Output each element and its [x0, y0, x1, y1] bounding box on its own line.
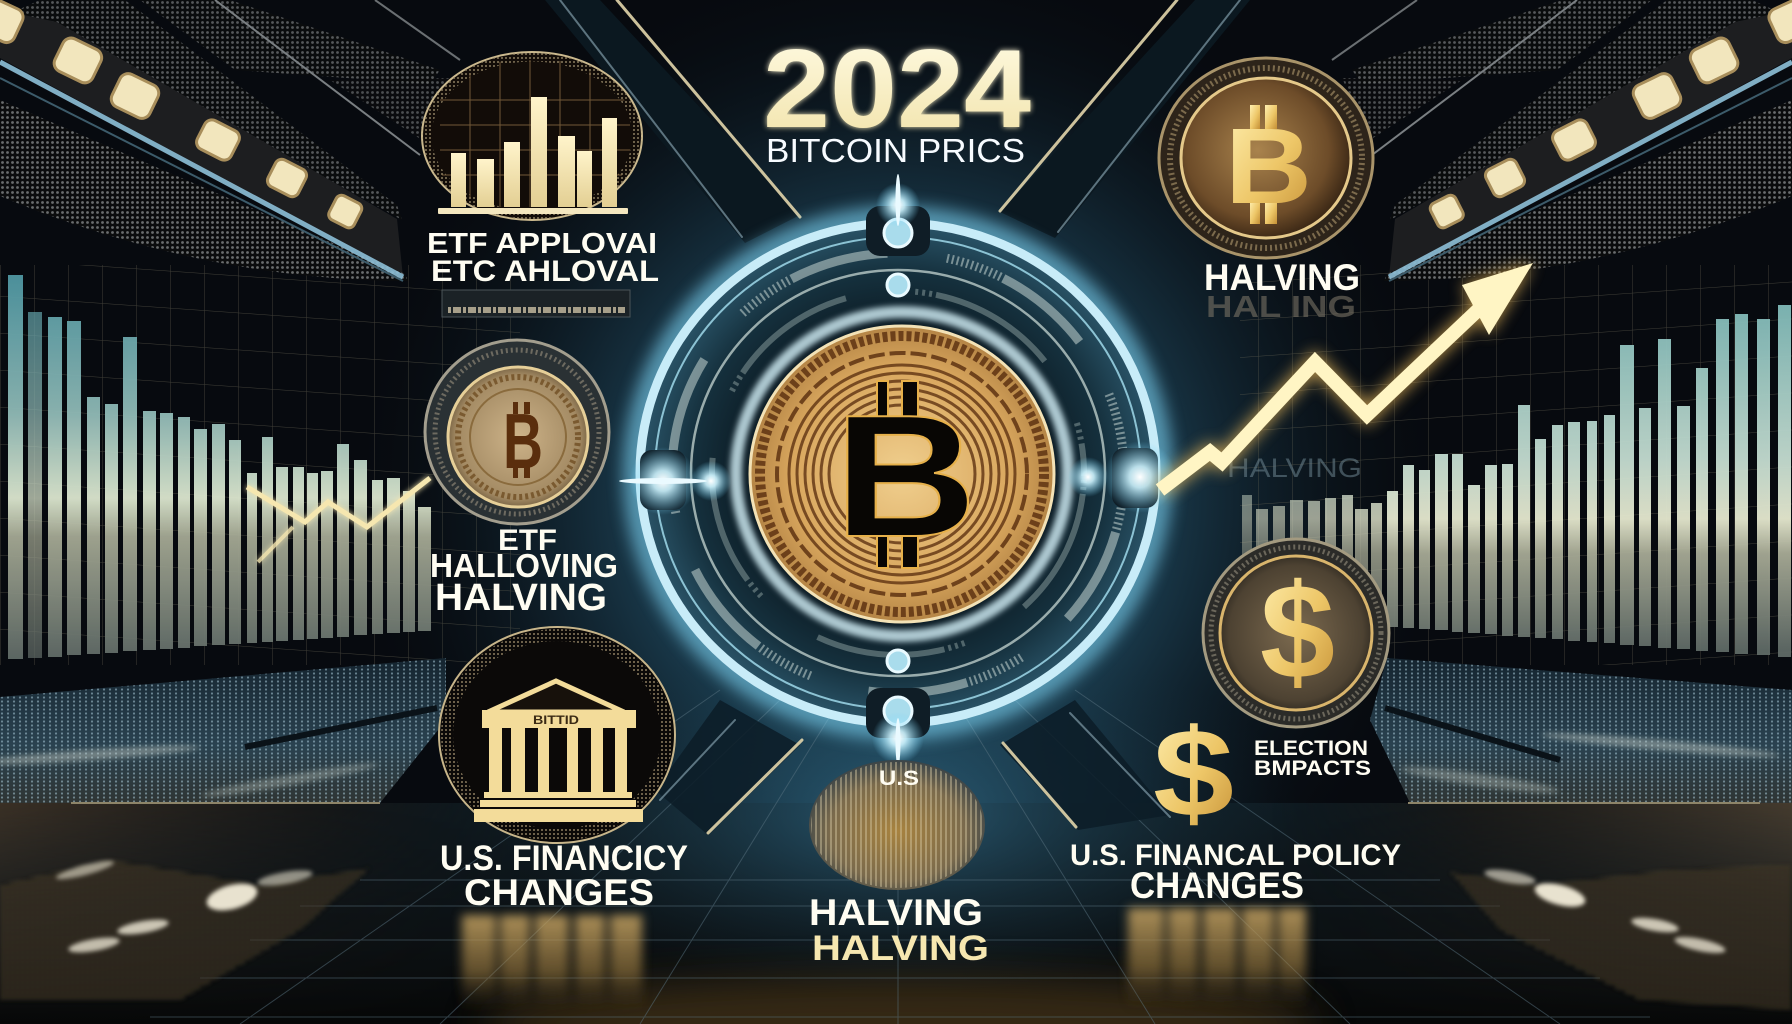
- gold floor reflection: left: [462, 915, 642, 1010]
- medallion: dollar coin: [1203, 539, 1389, 727]
- label: ETF approval lines: [427, 228, 659, 288]
- subtitle: bitcoin prics: BITCOIN PRICS: [766, 132, 1025, 169]
- floor: central tiles: [0, 733, 1792, 1024]
- outer ring glow: [636, 219, 1160, 727]
- main bitcoin symbol: B: [834, 378, 977, 573]
- floor tile lines: [150, 690, 1650, 1024]
- medallion disc: [422, 52, 642, 220]
- medallion: top-right bitcoin: [1159, 58, 1373, 258]
- medallion: bank building: [439, 627, 675, 843]
- strip: small panel under ETF label: [442, 290, 630, 317]
- medallion: dollar coin: $: [1260, 556, 1335, 707]
- label: halving center bottom: HALVING: [812, 929, 989, 968]
- ghost label: halving on wall: HALVING: [1227, 453, 1362, 483]
- label: ETF halloving halving: [430, 524, 618, 619]
- main coin disc: [750, 326, 1054, 622]
- light flares: [619, 174, 1176, 766]
- central ring assembly: [619, 174, 1176, 766]
- floor texture: [0, 658, 1792, 803]
- label: U.S. financial policy changes: [1070, 839, 1401, 906]
- title: 2024: 2024: [763, 27, 1031, 151]
- secondary ring: [655, 237, 1141, 709]
- medallion: left coin: [425, 340, 609, 524]
- label: U.S. financial policy changes: U.S. FINANCAL POLICY: [1070, 839, 1401, 872]
- label: election impacts: BMPACTS: [1254, 757, 1371, 780]
- label: halving center bottom: [809, 892, 989, 968]
- grid wall: left: [0, 265, 520, 665]
- ring body: [640, 223, 1156, 723]
- arrow: rising gold trend: [1160, 263, 1533, 490]
- label: ETF halloving halving: HALVING: [435, 577, 607, 619]
- icon: temple: [474, 681, 643, 822]
- floor: right reflective: [1370, 658, 1792, 803]
- ring nodes: [640, 206, 1158, 738]
- label: U.S. financial policy changes: CHANGES: [1130, 865, 1304, 906]
- glint band: right floor: [1450, 865, 1792, 1010]
- gold floor reflection: right: [1128, 908, 1306, 1008]
- coin engraving: [760, 336, 1044, 612]
- label: election impacts: [1254, 737, 1371, 780]
- icon: temple: BITTID: [533, 713, 579, 727]
- floor: left reflective: [0, 658, 446, 803]
- medallion: ETF bar chart: [422, 52, 642, 220]
- floor highlights: [0, 730, 1780, 801]
- label: ETF halloving halving: ETF: [498, 524, 557, 557]
- struts: diagonal connectors: [545, 0, 1250, 835]
- label: U.S. financicy changes: [440, 839, 688, 913]
- bars: [451, 97, 617, 207]
- label: election impacts: ELECTION: [1254, 737, 1368, 760]
- medallion: left coin: B: [503, 397, 543, 485]
- bar chart: right wall: [1242, 305, 1791, 657]
- beaded rim: [427, 57, 637, 215]
- medallion: U.S. center bottom: U.S: [879, 767, 919, 790]
- medallion: U.S. center bottom: [809, 760, 985, 890]
- grid: [440, 60, 630, 207]
- line chart: left gold trend: [247, 478, 430, 562]
- ceiling fixture: right: [1332, 0, 1792, 281]
- label: U.S. financicy changes: CHANGES: [464, 872, 654, 913]
- icon: large dollar sign: $: [1153, 704, 1234, 843]
- label: U.S. financicy changes: U.S. FINANCICY: [440, 839, 688, 878]
- ceiling fixture: left: [0, 0, 460, 281]
- grid wall: right: [1240, 265, 1792, 665]
- shelf: [438, 208, 628, 214]
- glint band: left floor: [0, 857, 370, 1000]
- outer bright ring: [640, 223, 1156, 723]
- ghost label: hal ing: HAL ING: [1206, 289, 1356, 324]
- tick bands: [672, 253, 1124, 693]
- coin halo: [736, 312, 1068, 636]
- bar chart: left wall: [8, 275, 431, 659]
- label: halving center bottom: HALVING: [809, 892, 983, 933]
- label: ETF approval lines: ETC AHLOVAL: [431, 255, 659, 288]
- medallion: top-right bitcoin: B: [1225, 105, 1312, 226]
- label: ETF halloving halving: HALLOVING: [430, 547, 618, 584]
- label: halving top right: HALVING: [1204, 257, 1360, 298]
- label: ETF approval lines: ETF APPLOVAI: [427, 228, 657, 260]
